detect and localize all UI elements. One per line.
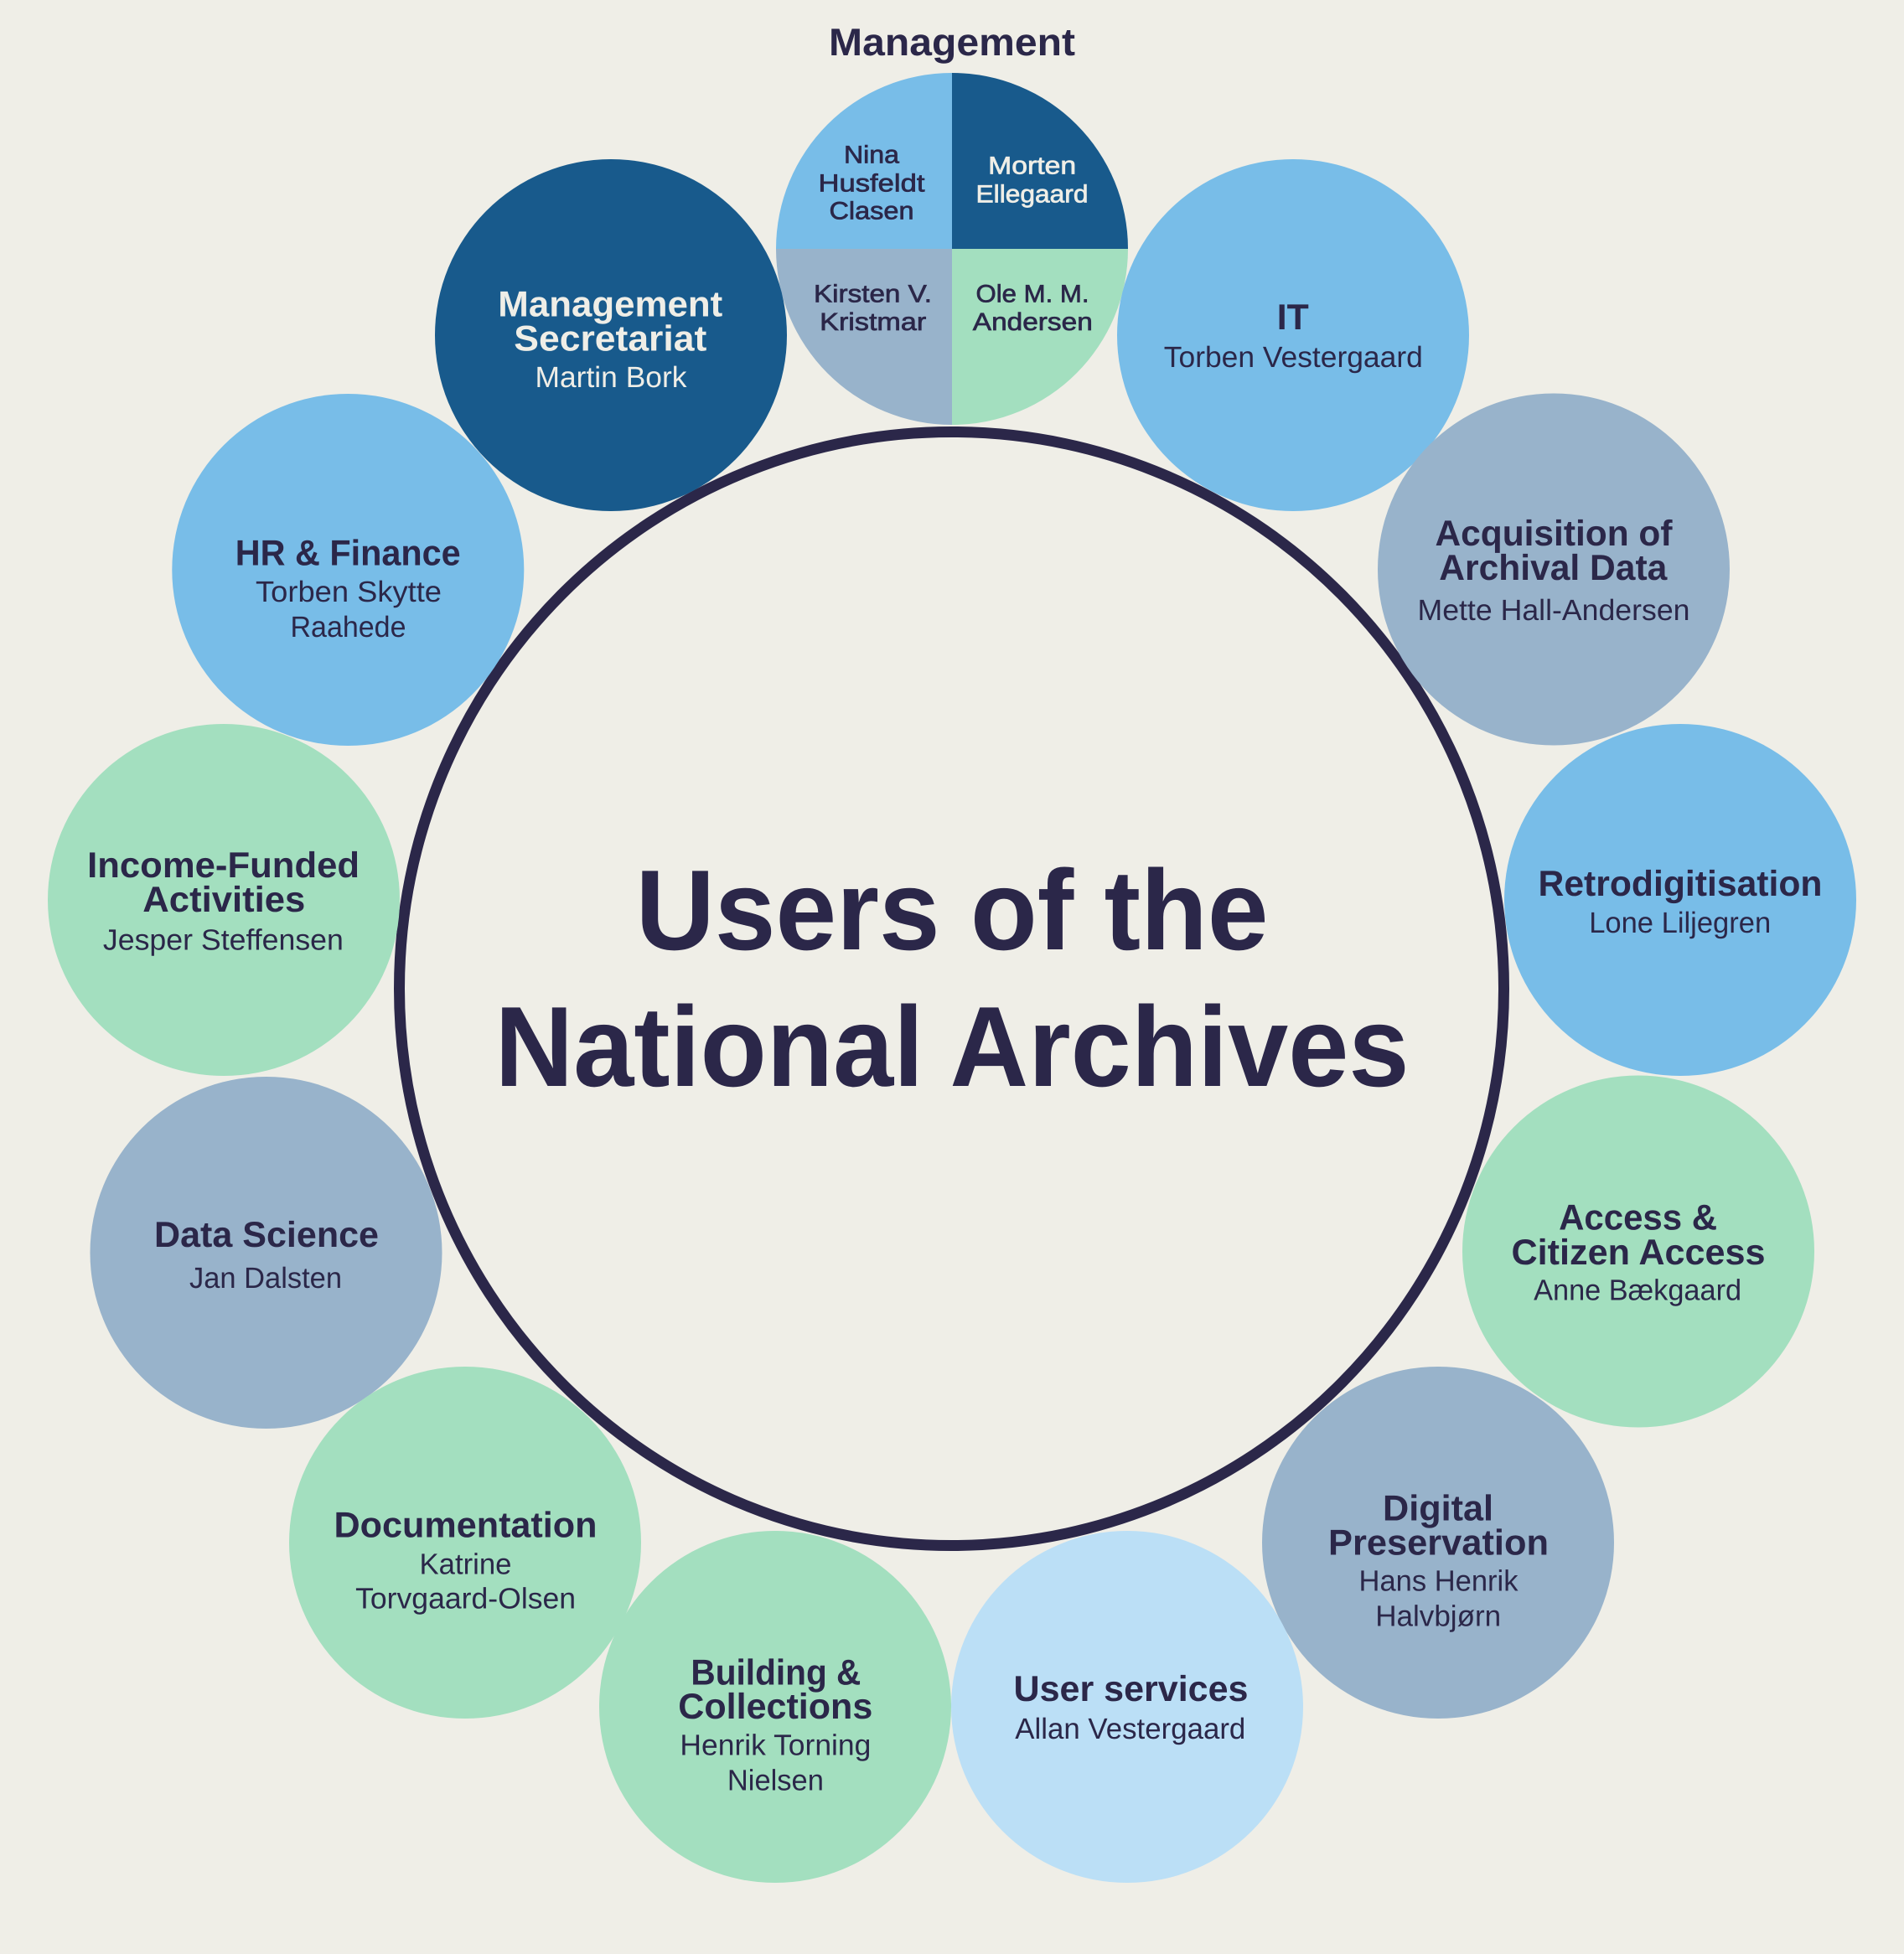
name: Katrine	[419, 1548, 511, 1581]
heading: Digital	[1383, 1488, 1493, 1528]
wedge: Ole M. M. Andersen: Ole M. M.	[975, 280, 1089, 308]
wedge: Morten Ellegaard: Ellegaard	[975, 181, 1088, 209]
panel: IT	[1117, 159, 1469, 511]
panel: Acquisition of Archival Data	[1378, 394, 1730, 746]
heading line 2: Activities	[142, 880, 305, 920]
name line 2: Nielsen	[727, 1765, 824, 1797]
wedge: Nina Husfeldt Clasen	[776, 73, 952, 249]
wedge: Ole M. M. Andersen: Andersen	[973, 308, 1093, 336]
heading: Building &	[691, 1653, 861, 1693]
name: Henrik Torning	[680, 1729, 871, 1762]
heading line 2: Collections	[678, 1687, 872, 1727]
heading line 2: Citizen Access	[1512, 1233, 1765, 1273]
name line 2: Raahede	[290, 611, 406, 644]
wedge: Kirsten V. Kristmar: Kirsten V.	[814, 280, 932, 308]
heading line 2: Secretariat	[514, 318, 706, 359]
heading: Management: Management	[829, 20, 1075, 64]
heading: Data Science	[154, 1215, 379, 1255]
wedge: Nina Husfeldt Clasen: Nina	[844, 142, 900, 169]
circle	[1378, 394, 1730, 746]
heading: Access &	[1559, 1198, 1717, 1238]
panel: Retrodigitisation	[1504, 724, 1856, 1076]
circle	[289, 1367, 641, 1719]
heading line 2: Preservation	[1328, 1522, 1549, 1563]
panel: Income-Funded Activities	[48, 724, 400, 1076]
title: line 1: Users of the	[635, 846, 1269, 974]
name: Hans Henrik	[1359, 1565, 1519, 1598]
heading: Management	[498, 285, 722, 325]
name: Mette Hall-Andersen	[1418, 594, 1689, 627]
panel: Access & Citizen Access	[1462, 1076, 1814, 1428]
central ring with title	[399, 432, 1503, 1545]
panel: Data Science	[91, 1077, 442, 1429]
wedge: Nina Husfeldt Clasen: Husfeldt	[818, 169, 925, 197]
circle	[91, 1077, 442, 1429]
wedge: Kirsten V. Kristmar	[776, 249, 952, 425]
circle	[48, 724, 400, 1076]
wedge: Morten Ellegaard: Morten	[988, 152, 1076, 180]
panel: User services	[951, 1531, 1303, 1883]
ring outline	[399, 432, 1503, 1545]
wedge: Ole M. M. Andersen	[952, 249, 1128, 425]
heading: HR & Finance	[235, 533, 461, 573]
panel: management pie	[776, 73, 1128, 425]
circle	[172, 394, 524, 746]
circle	[1262, 1367, 1614, 1719]
heading: Acquisition of	[1435, 514, 1673, 554]
circle	[1504, 724, 1856, 1076]
heading: IT	[1277, 297, 1309, 338]
panel: HR & Finance	[172, 394, 524, 746]
name: Torben Vestergaard	[1164, 341, 1423, 374]
name: Jan Dalsten	[189, 1262, 342, 1295]
name: Torben Skytte	[256, 576, 442, 608]
heading line 2: Archival Data	[1439, 548, 1668, 588]
name: Jesper Steffensen	[103, 924, 344, 957]
name line 2: Halvbjørn	[1375, 1600, 1501, 1633]
panel: Digital Preservation	[1262, 1367, 1614, 1719]
wedge: Nina Husfeldt Clasen: Clasen	[830, 198, 913, 225]
circle	[1462, 1076, 1814, 1428]
title: line 2: National Archives	[494, 983, 1410, 1110]
wedge: Kirsten V. Kristmar: Kristmar	[820, 308, 926, 336]
wedge: Morten Ellegaard	[952, 73, 1128, 249]
heading: Documentation	[334, 1505, 597, 1545]
name line 2: Torvgaard-Olsen	[355, 1583, 576, 1615]
panel: Documentation	[289, 1367, 641, 1719]
circle	[1117, 159, 1469, 511]
heading: Retrodigitisation	[1539, 864, 1822, 904]
circle	[951, 1531, 1303, 1883]
heading: User services	[1014, 1669, 1249, 1709]
name: Martin Bork	[535, 361, 687, 394]
heading: Income-Funded	[87, 845, 360, 886]
panel: Management Secretariat	[435, 159, 787, 511]
name: Allan Vestergaard	[1015, 1713, 1245, 1745]
circle	[435, 159, 787, 511]
name: Lone Liljegren	[1589, 907, 1771, 939]
name: Anne Bækgaard	[1534, 1274, 1741, 1307]
panel: Building & Collections	[599, 1531, 951, 1883]
circle	[599, 1531, 951, 1883]
